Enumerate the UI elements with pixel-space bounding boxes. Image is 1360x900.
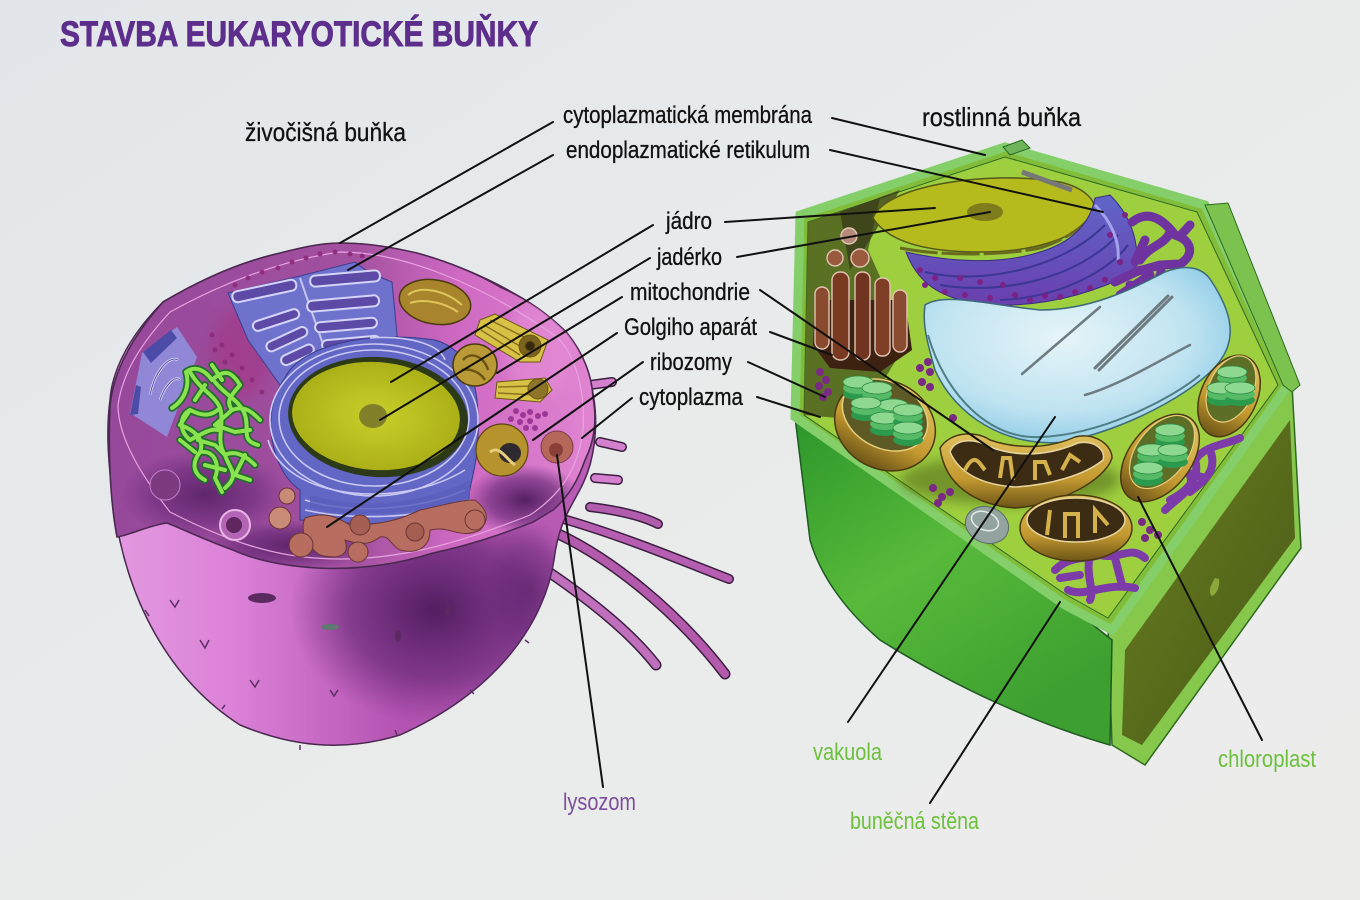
body shading [298,526,556,716]
mitochondrion 1 [940,434,1112,508]
ribosomes: plant [815,358,1162,542]
lysosome [541,431,573,463]
mitochondrion 2 [1020,495,1132,561]
vacuole fibres [1022,296,1190,395]
label: mitochondria: mitochondrie [630,279,750,306]
golgi sacs and vesicles: salmon [269,488,486,562]
label: cytoplasm: cytoplazma [639,384,744,411]
smooth endoplasmic reticulum: purple [1055,216,1240,600]
top cut face of plant cell [795,147,1288,630]
heading: plant cell: rostlinná buňka [922,102,1081,132]
wall corners [1205,203,1300,392]
label: chloroplast: chloroplast [1218,746,1316,773]
right wall panel [1108,385,1301,765]
label: nucleus: jádro [665,208,712,235]
heading: animal cell: živočišná buňka [245,117,406,147]
flagella / cell projections [520,382,729,674]
chloroplast 3 [1185,345,1273,447]
cut face of cytoplasm [109,243,595,568]
vesicles on the cut face [150,470,250,540]
animal cell [108,243,729,750]
label: ribosomes: ribozomy [650,349,732,376]
label: nucleolus: jadérko [656,244,722,271]
nucleolus [359,404,387,428]
interior shadow [804,198,905,420]
label: endoplasmic reticulum: endoplazmatické retikulum [566,137,810,164]
nucleus: animal [284,351,472,483]
label: golgi apparatus: Golgiho aparát [624,314,757,341]
label: vacuole: vakuola [813,739,883,766]
centrioles [475,314,552,402]
golgi apparatus: animal [130,327,197,437]
nucleus: plant [873,172,1095,254]
leader lines [327,118,1262,803]
cell wall strip [795,147,1288,630]
chloroplast 2 [1105,400,1215,516]
rough endoplasmic reticulum: plant [906,195,1137,305]
cytoplasm shadows [120,300,585,570]
rough endoplasmic reticulum: animal [210,250,398,394]
label: cytoplasmic membrane: cytoplazmatická membrána [563,102,813,129]
cytoplasm inner membrane [118,252,583,559]
label: lysosome: lysozom [563,789,636,816]
chloroplast 1 [818,362,952,488]
endoplasmic reticulum around nucleus [268,337,482,530]
vacuole-like organelle [476,424,528,476]
label: cell wall: buněčná stěna [850,808,980,835]
front wall [795,417,1112,745]
grey organelle [960,501,1014,549]
mitochondria: animal [396,274,497,386]
membrane pores and bumps [117,485,451,642]
ribosomes: animal [508,408,548,431]
golgi apparatus: plant [813,228,912,372]
vacuole [924,267,1230,443]
smooth endoplasmic reticulum: green [172,365,260,492]
plant cell [795,140,1301,765]
cell body [108,243,596,745]
nucleolus [967,203,1003,221]
title: STAVBA EUKARYOTICKÉ BUŇKY [60,14,538,54]
